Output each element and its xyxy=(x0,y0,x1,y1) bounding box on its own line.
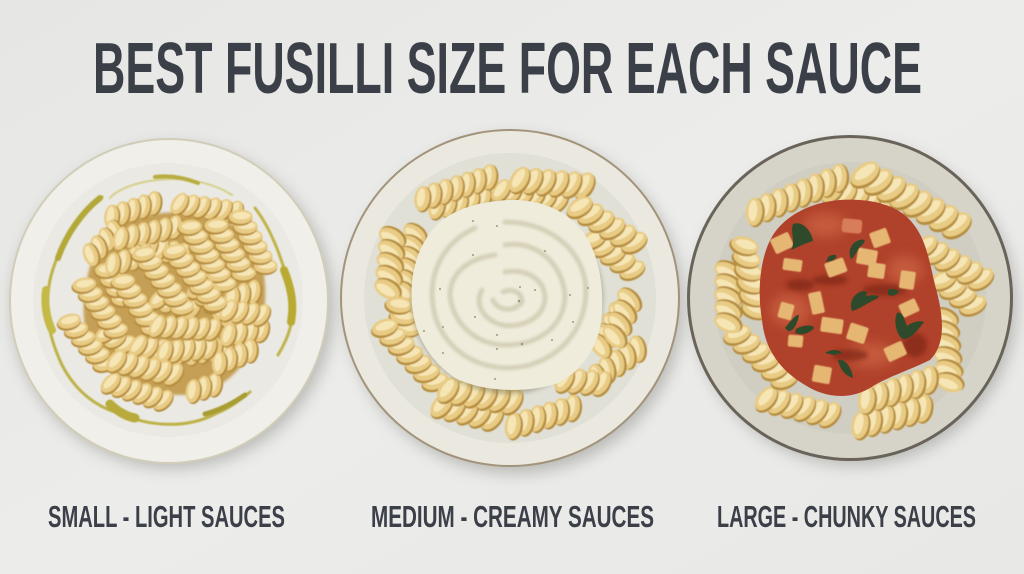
tomato chunks xyxy=(770,218,920,384)
small fusilli pile xyxy=(50,186,284,419)
tomato sauce xyxy=(760,200,942,396)
plate: white plate xyxy=(9,138,333,468)
large fusilli ring xyxy=(711,150,1003,446)
label: medium: MEDIUM - CREAMY SAUCES xyxy=(371,499,654,534)
olive oil drizzle xyxy=(45,176,292,424)
label: small: SMALL - LIGHT SAUCES xyxy=(48,499,285,534)
medium fusilli ring xyxy=(363,159,659,446)
panel: small fusilli with light sauce xyxy=(9,138,333,534)
plate: grey stoneware plate xyxy=(687,135,1016,465)
basil leaves xyxy=(785,223,924,378)
panel: medium fusilli with creamy sauce xyxy=(340,129,683,534)
cream sauce xyxy=(411,200,603,394)
plate: cream plate xyxy=(340,129,683,473)
panel: large fusilli with chunky sauce xyxy=(687,135,1016,534)
